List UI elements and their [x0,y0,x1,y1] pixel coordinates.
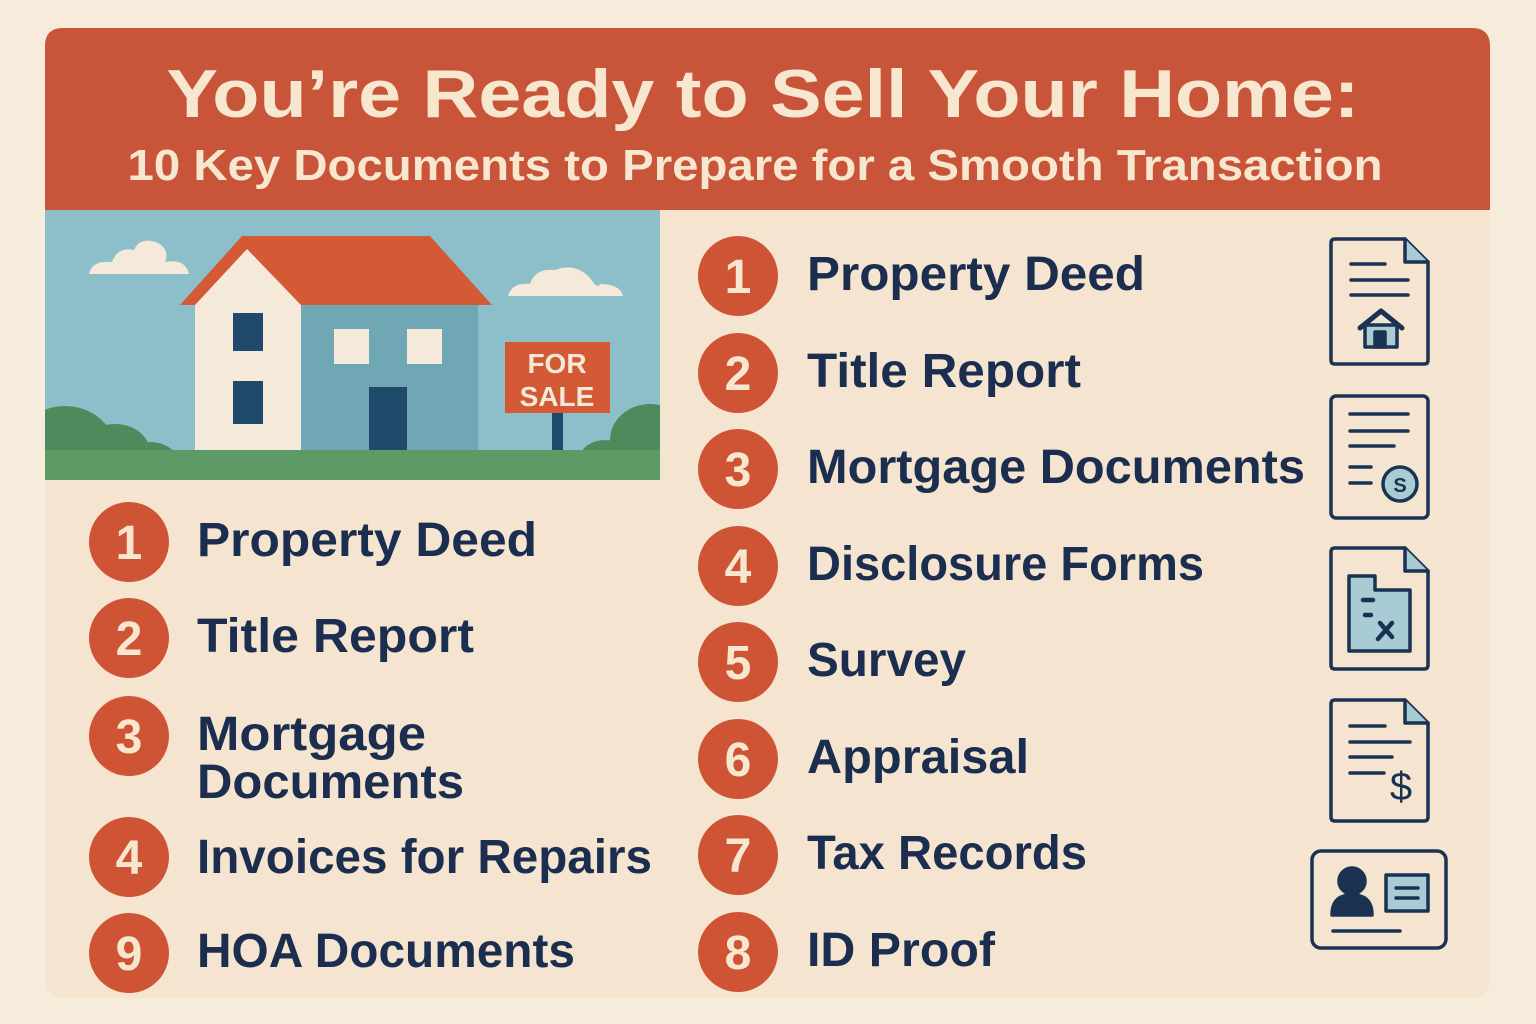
list: right column: Survey [807,634,966,687]
list: right column: Tax Records [807,827,1087,880]
list: right column: ID Proof [807,924,996,977]
icon: mortgage [1331,396,1428,518]
list: left column: Mortgage [197,708,426,761]
list: left column: 3 [116,711,142,764]
title: You’re Ready to Sell Your Home: [166,56,1360,132]
list: right column: Property Deed [807,248,1145,301]
list: left column: HOA Documents [197,925,575,978]
list: right column: 1 [725,251,751,304]
icon: mortgage: S [1393,475,1407,497]
list: right column: 8 [725,927,751,980]
list: right column: 2 [725,348,751,401]
list: right column: 7 [725,830,751,883]
list: right column: Disclosure Forms [807,538,1204,591]
list: right column: 3 [725,444,751,497]
list: right column: 5 [725,637,751,690]
list: left column: Invoices for Repairs [197,831,652,884]
list: right column [698,236,1305,992]
illustration: house for sale [45,210,660,480]
list: left column: 1 [116,517,142,570]
icon: appraisal [1331,700,1428,821]
subtitle: 10 Key Documents to Prepare for a Smooth Transaction [128,141,1382,190]
list: left column: 9 [116,928,142,981]
list: right column: 6 [725,734,751,787]
icon: deed [1331,239,1428,364]
list: left column [89,502,652,993]
icons column [1312,239,1446,948]
icon: appraisal: $ [1390,765,1412,809]
list: right column: Mortgage Documents [807,441,1305,494]
list: left column: Property Deed [197,514,537,567]
header banner [45,28,1490,210]
icon: ID card [1312,851,1446,948]
list: right column: Title Report [807,345,1081,398]
sign [505,342,610,413]
list: left column: 4 [116,832,143,885]
illustration: house for sale: FOR [527,348,587,379]
list: left column: Title Report [197,610,474,663]
list: right column: 4 [725,541,752,594]
icon: survey map [1331,548,1428,669]
list: left column: 2 [116,613,142,666]
list: right column: Appraisal [807,731,1029,784]
illustration: house for sale: SALE [520,381,594,412]
list: left column: Documents [197,756,464,809]
